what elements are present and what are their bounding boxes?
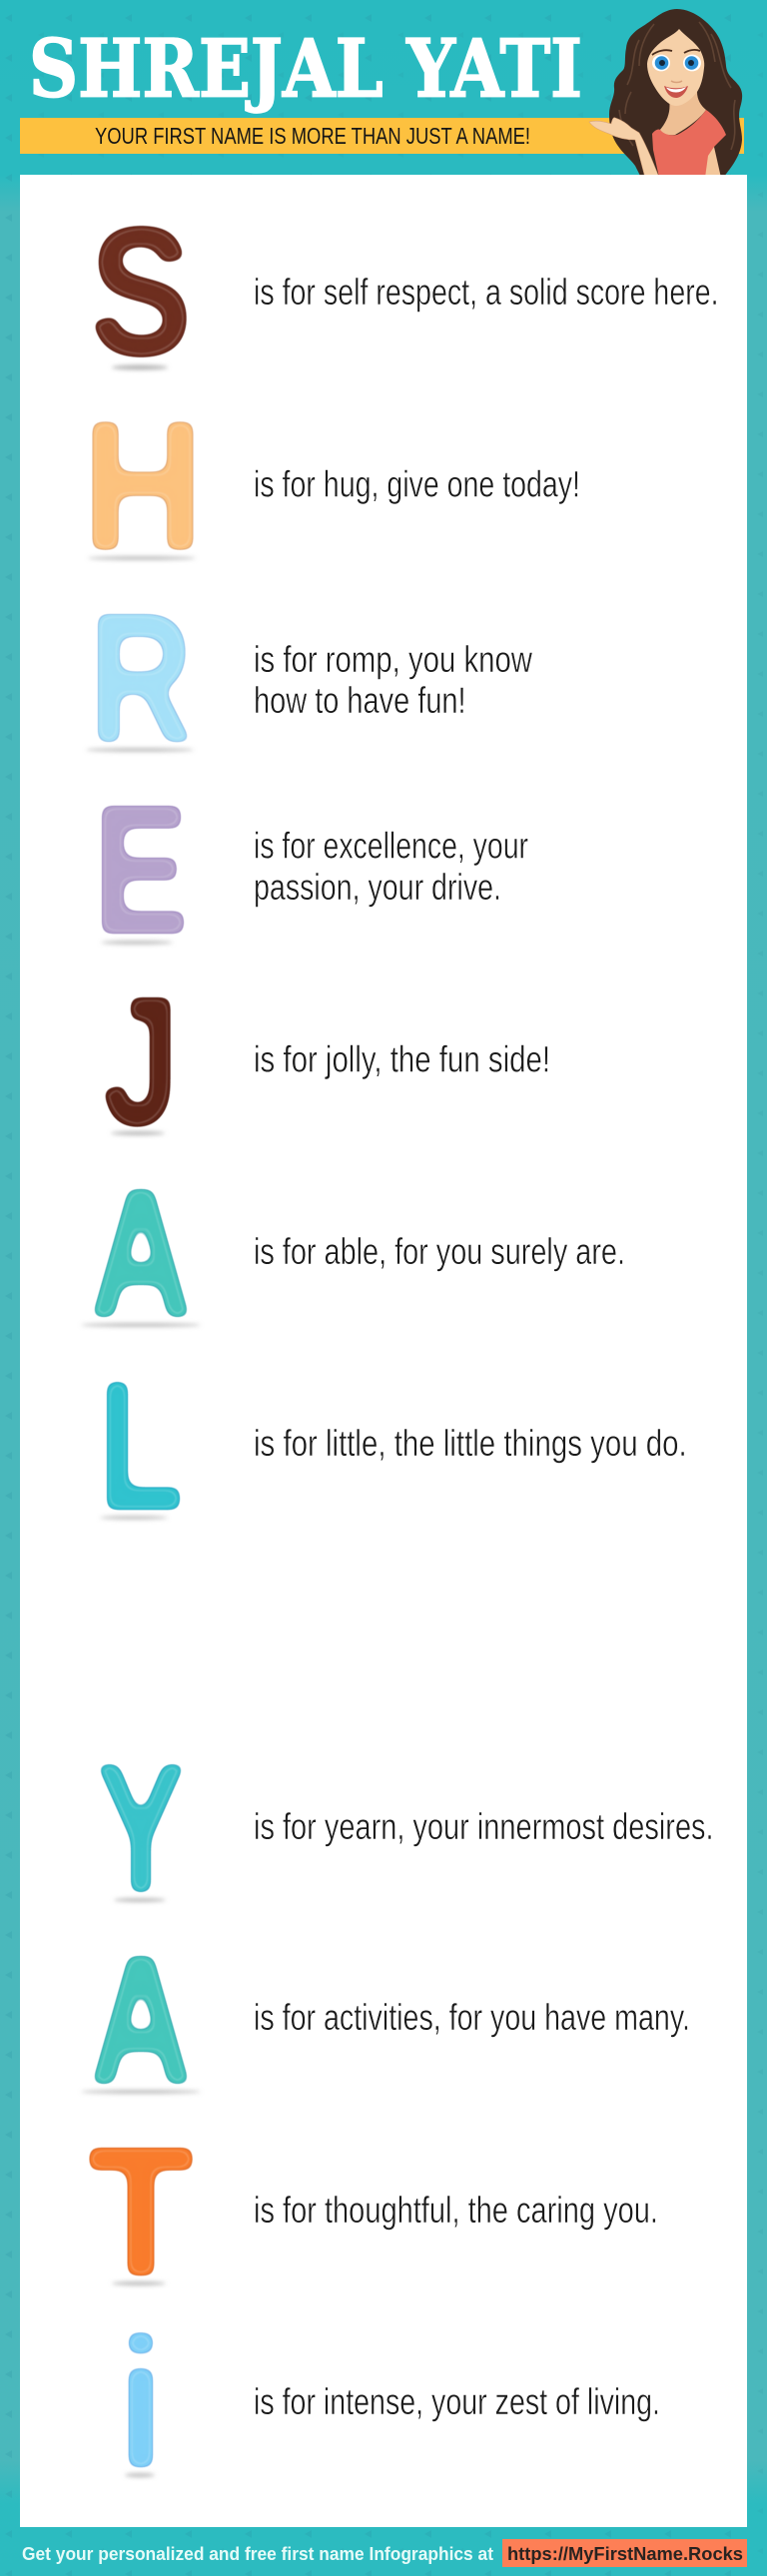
icon: J shadow [111, 1131, 165, 1135]
icon: cartoon woman [589, 9, 742, 178]
text: H description: is for hug, give one today! [254, 463, 580, 505]
icon: A shadow [81, 1323, 201, 1327]
subtitle banner [20, 118, 744, 154]
row: letter T [88, 2109, 658, 2313]
subtitle banner: YOUR FIRST NAME IS MORE THAN JUST A NAME! [95, 123, 530, 149]
text: J description: is for jolly, the fun side! [254, 1039, 550, 1080]
row: letter E [93, 768, 528, 971]
icon: Y shadow [114, 1898, 166, 1902]
text: E description [254, 825, 528, 908]
row: letter A [81, 1150, 625, 1355]
icon: glossy letter S: S [90, 189, 192, 393]
icon: glossy letter Y: Y [96, 1726, 186, 1931]
row: letter S [90, 189, 719, 393]
row: letter Y [96, 1726, 714, 1931]
row: letter R [86, 576, 532, 780]
text: i description: is for intense, your zest of living. [254, 2381, 660, 2422]
icon: second glossy letter A: A [89, 1917, 193, 2122]
icon: T shadow [112, 2281, 166, 2285]
text: R description: is for romp, you know [254, 639, 532, 680]
footer text: Get your personalized and free first name Infographics at [22, 2544, 493, 2564]
text: R description [254, 639, 532, 721]
row: letter i [118, 2300, 660, 2505]
icon: glossy letter L: L [98, 1343, 184, 1548]
footer link badge: https://MyFirstName.Rocks [507, 2544, 743, 2564]
row: letter A second [81, 1917, 690, 2122]
icon: H shadow [88, 556, 196, 560]
row: letter J [102, 961, 550, 1163]
icon: glossy letter E: E [93, 768, 189, 971]
icon: i shadow [125, 2473, 155, 2477]
text: A description: is for able, for you surely are. [254, 1231, 625, 1272]
icon: glossy letter T: T [88, 2109, 194, 2313]
text: E description: is for excellence, your [254, 825, 528, 867]
icon: glossy letter A: A [89, 1150, 193, 1355]
title: SHREJAL YATI [29, 22, 582, 116]
icon: L shadow [100, 1516, 168, 1520]
icon: glossy letter J: J [102, 961, 180, 1163]
text: R description: how to have fun! [254, 680, 466, 721]
icon: S shadow [112, 365, 168, 369]
icon: R shadow [86, 748, 194, 752]
icon: glossy letter R: R [89, 576, 193, 780]
row: letter H [82, 384, 580, 588]
icon: second A shadow [81, 2090, 201, 2094]
text: T description: is for thoughtful, the caring you. [254, 2190, 658, 2231]
icon: E shadow [101, 941, 173, 945]
footer [22, 2539, 747, 2567]
text: E description: passion, your drive. [254, 867, 501, 908]
row: letter L [98, 1343, 687, 1548]
icon: glossy letter H: H [82, 384, 204, 588]
footer link badge [502, 2539, 747, 2567]
icon: glossy letter i: i [118, 2300, 164, 2505]
